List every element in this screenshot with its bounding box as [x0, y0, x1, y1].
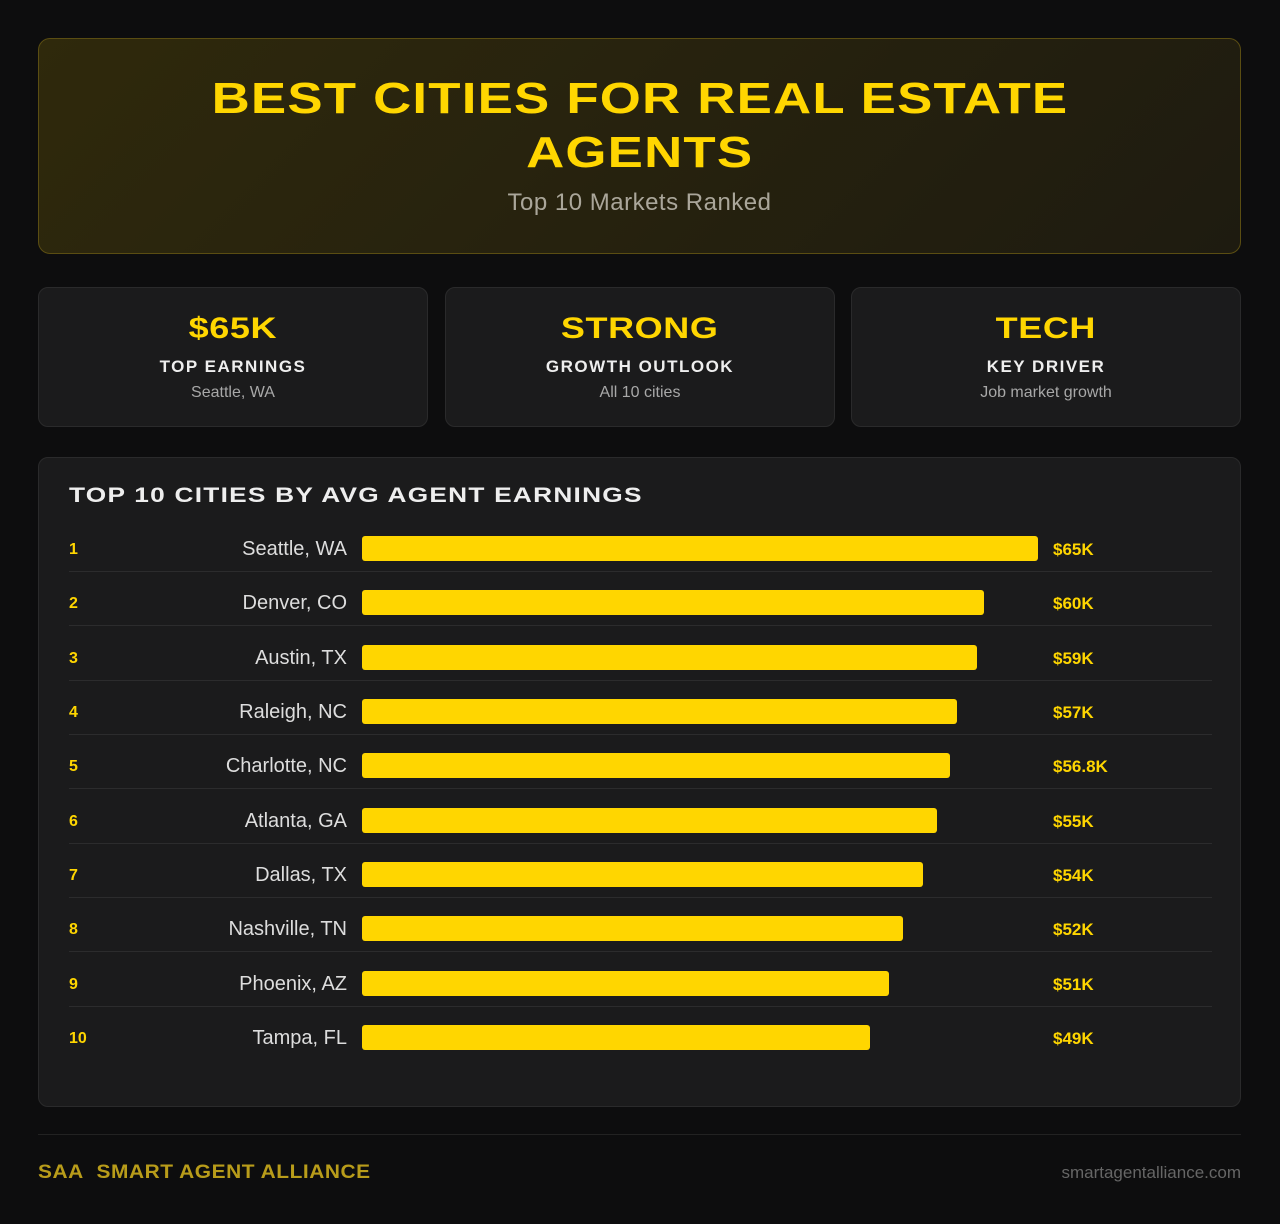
row 9: $51K [1053, 975, 1094, 994]
stat card: growth outlook: GROWTH OUTLOOK [546, 357, 734, 376]
row 1: 1 [69, 541, 78, 558]
subtitle: Top 10 Markets Ranked [508, 189, 771, 216]
row 6: $55K [1053, 812, 1094, 831]
row 10: Tampa, FL [253, 1027, 347, 1049]
row 2: $60K [1053, 594, 1094, 613]
row 2: 2 [69, 595, 78, 612]
footer url: smartagentalliance.com [1061, 1163, 1241, 1182]
row 10: 10 [69, 1030, 87, 1047]
row 9: Phoenix, AZ [239, 973, 347, 995]
title: AGENTS [526, 128, 753, 177]
stat card: growth outlook [445, 287, 835, 427]
footer logo: SAA SMART AGENT ALLIANCE [38, 1162, 371, 1183]
row 8 [69, 898, 1212, 952]
row 10 [69, 1025, 1094, 1050]
row 3 [69, 627, 1212, 681]
row 2: Denver, CO [243, 592, 347, 614]
row 6: Atlanta, GA [245, 810, 347, 832]
stat card: key driver: KEY DRIVER [987, 357, 1105, 376]
row 3: 3 [69, 650, 78, 667]
row 5: Charlotte, NC [226, 755, 347, 777]
row 4: $57K [1053, 703, 1094, 722]
row 5: 5 [69, 758, 78, 775]
row 9 [69, 953, 1212, 1007]
row 8: $52K [1053, 920, 1094, 939]
stat card: top earnings: Seattle, WA [191, 384, 275, 401]
stat card: key driver: Job market growth [980, 384, 1112, 401]
chart heading: TOP 10 CITIES BY AVG AGENT EARNINGS [69, 484, 643, 507]
stat card: key driver: TECH [996, 312, 1096, 345]
row 1: Seattle, WA [242, 538, 347, 560]
row 8: 8 [69, 921, 78, 938]
stat card: growth outlook: STRONG [561, 312, 719, 345]
stat card: growth outlook: All 10 cities [600, 384, 680, 401]
row 7: $54K [1053, 866, 1094, 885]
row 7 [69, 844, 1212, 898]
title [211, 74, 1068, 177]
row 1: $65K [1053, 540, 1094, 559]
row 4 [69, 681, 1212, 735]
stat card: top earnings [38, 287, 428, 427]
title: BEST CITIES FOR REAL ESTATE [211, 74, 1068, 123]
row 7: Dallas, TX [255, 864, 347, 886]
row 7: 7 [69, 867, 78, 884]
row 6: 6 [69, 813, 78, 830]
row 2 [69, 572, 1212, 626]
stat card: key driver [851, 287, 1241, 427]
row 5: $56.8K [1053, 757, 1108, 776]
row 4: Raleigh, NC [239, 701, 347, 723]
row 3: Austin, TX [255, 647, 347, 669]
row 3: $59K [1053, 649, 1094, 668]
row 8: Nashville, TN [228, 918, 347, 940]
row 9: 9 [69, 976, 78, 993]
row 1 [69, 518, 1212, 572]
row 5 [69, 735, 1212, 789]
panel: bar chart [38, 457, 1241, 1107]
row 4: 4 [69, 704, 78, 721]
row 10: $49K [1053, 1029, 1094, 1048]
row 6 [69, 790, 1212, 844]
stat card: top earnings: TOP EARNINGS [160, 357, 306, 376]
header panel [38, 38, 1241, 254]
stat card: top earnings: $65K [189, 312, 277, 345]
